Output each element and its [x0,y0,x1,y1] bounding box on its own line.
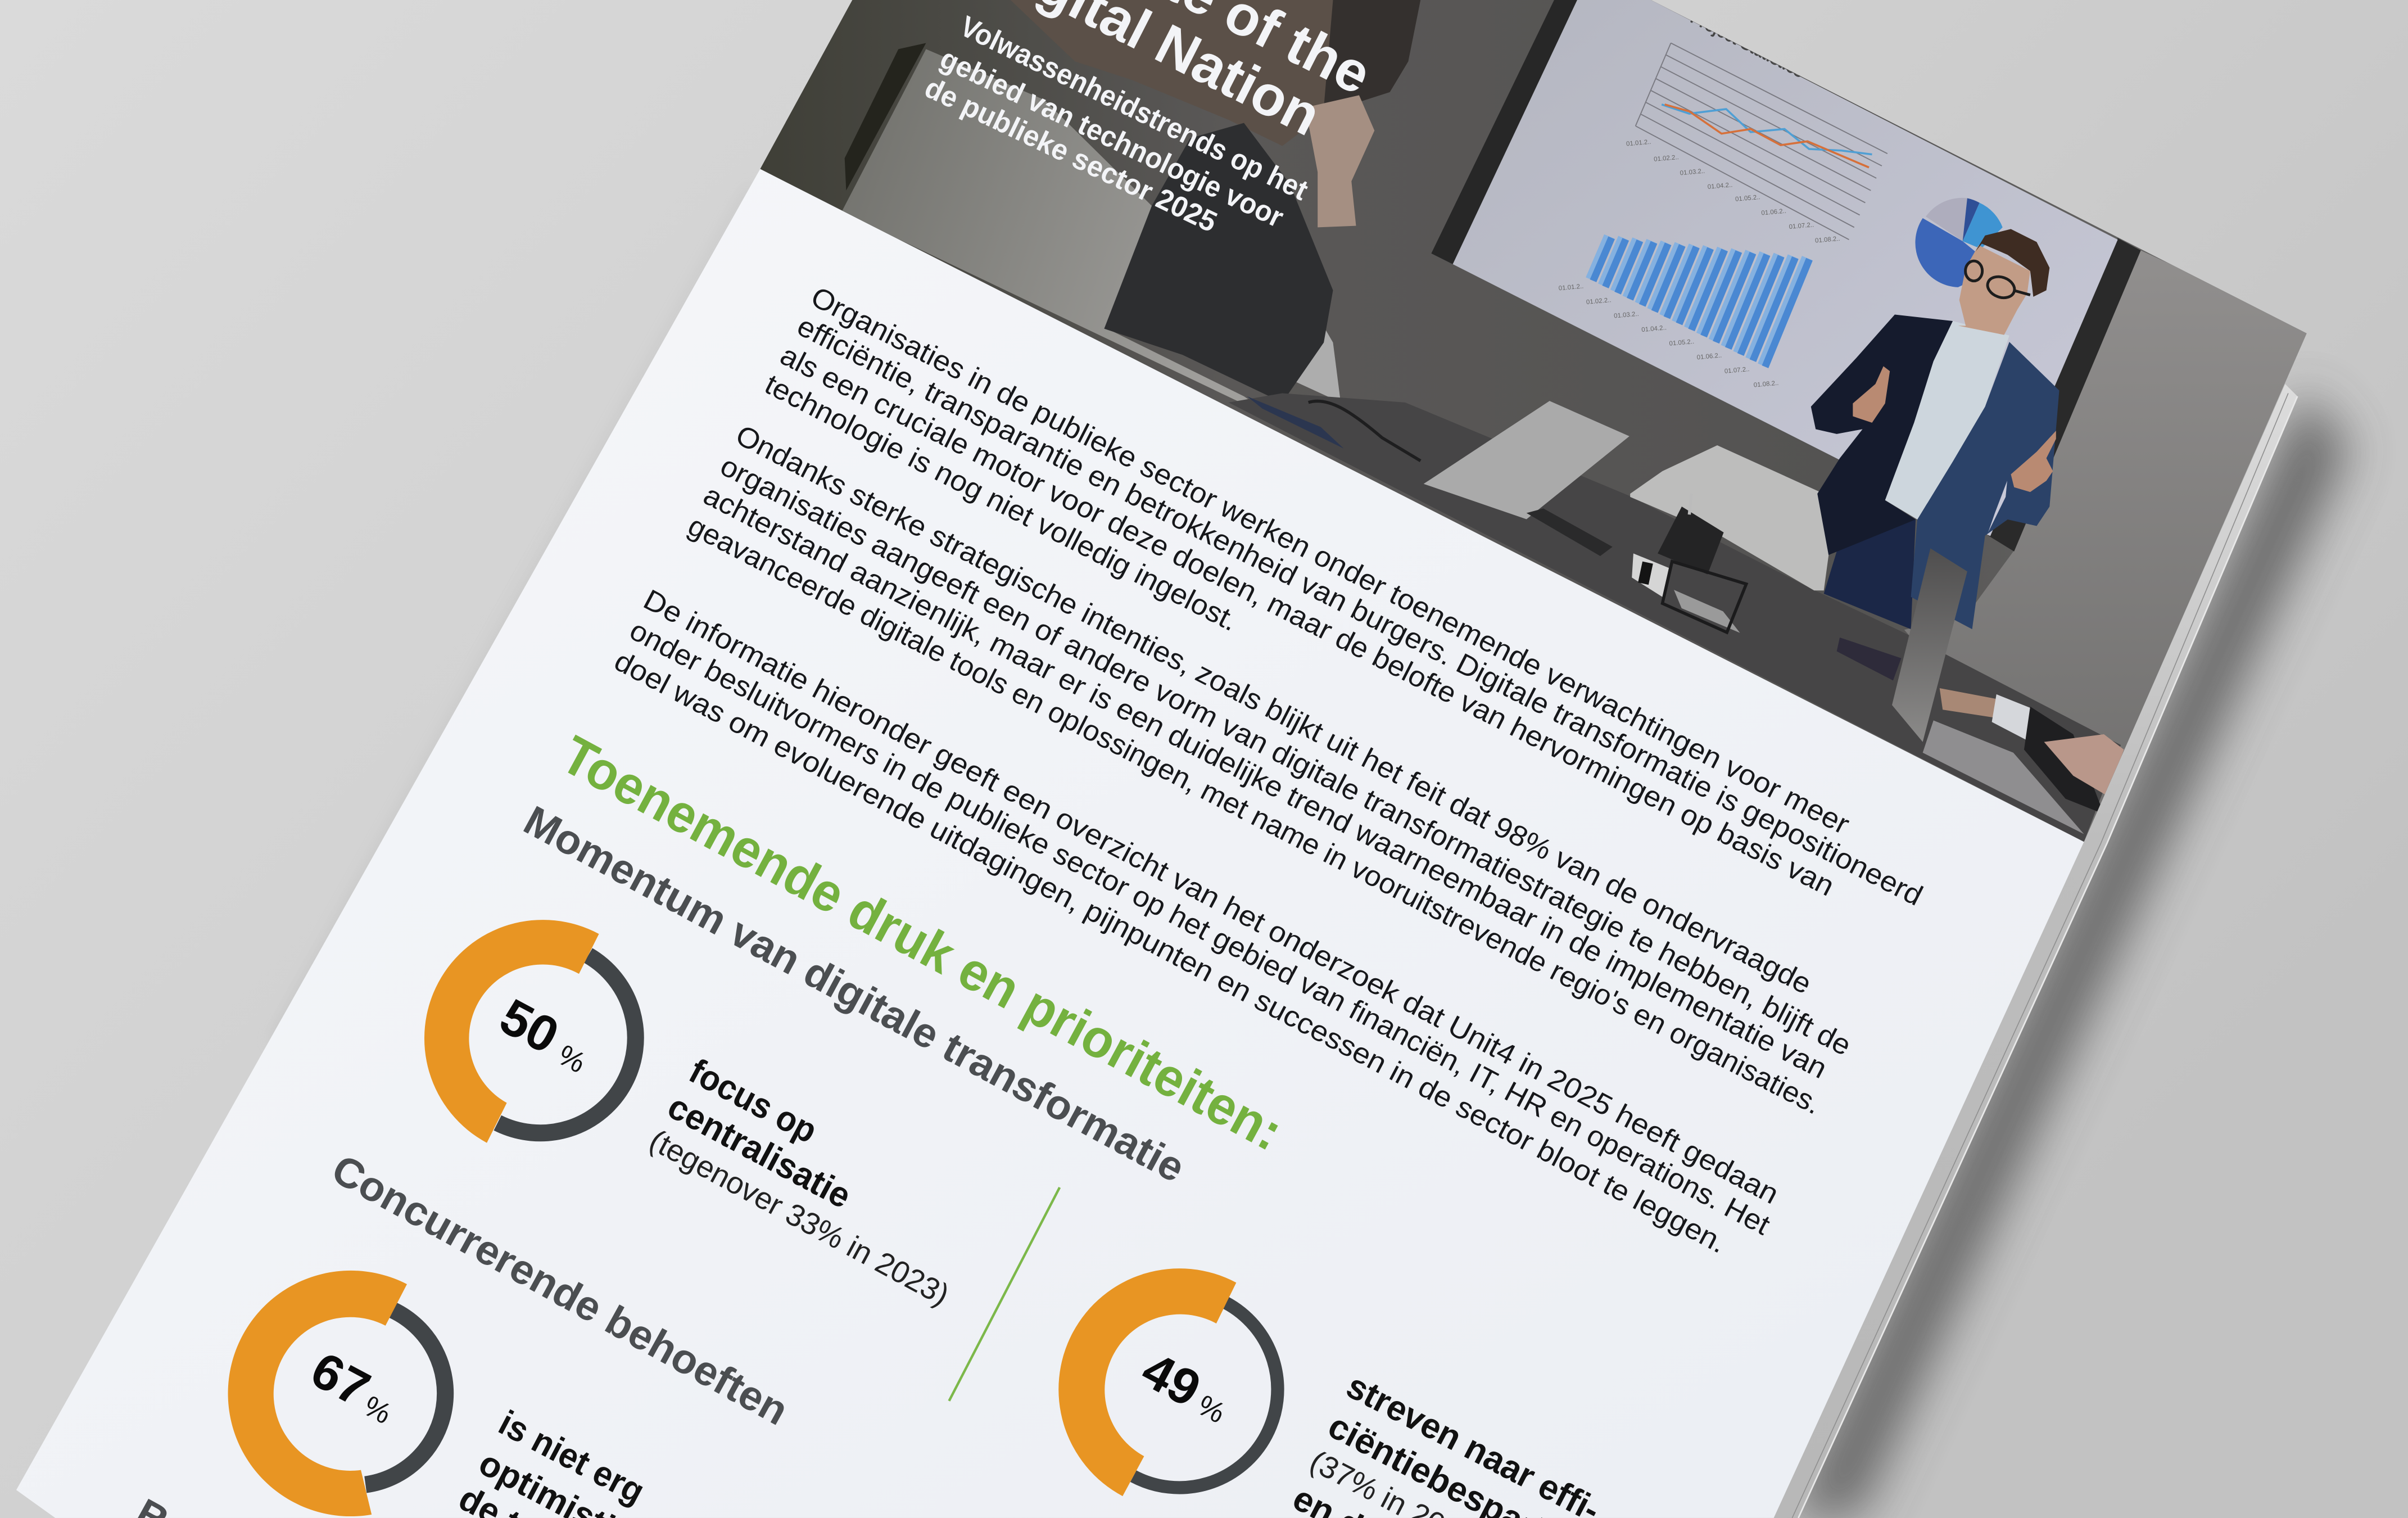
donut: 49%: % [1192,1389,1230,1430]
brochure shadow [1789,392,2350,1517]
line chart: 01.02.2.. [1654,154,1679,163]
table [1229,393,2121,842]
subheading: concurrerende behoeften: Concurrerende behoeften [324,1145,796,1434]
donut: 50%: % [553,1038,591,1079]
glasses [1966,261,2030,301]
donut: 49%: 49 [1133,1341,1210,1418]
presenter [1811,229,2060,629]
blue cushion [1247,396,1344,449]
navy jacket side [1911,342,2060,629]
intro paragraph 3: doel was om evoluerende uitdagingen, pijnpunten en successen in de sector bloot te leggen. [609,644,1732,1259]
man's face and hand [1305,95,1374,227]
trousers [1824,513,1916,629]
right wall [1904,250,2319,845]
white chair back [1267,255,1341,403]
bar chart [1558,237,1809,388]
line chart: 01.01.2.. [1626,139,1651,148]
intro paragraph 2: Ondanks sterke strategische intenties, zoals blijkt uit het feit dat 98% van de ondervraagde [731,419,1817,1000]
line chart: 01.08.2.. [1815,236,1840,245]
intro paragraph 3: onder besluitvormers in de publieke sector op het gebied van financiën, IT, HR en operations. Het [624,614,1775,1241]
line chart: 01.07.2.. [1789,222,1814,231]
brochure white page [16,169,2084,1518]
hair [1975,229,2049,297]
hands on right [1940,688,2124,814]
left sheet edge shadow [269,181,755,1045]
donut: 49% [1058,1268,1278,1496]
intro paragraph 1: efficiëntie, transparantie en betrokkenheid van burgers. Digitale transformatie is gepositioneerd [792,310,1928,912]
intro paragraph 2: achterstand aanzienlijk, maar er is een duidelijke trend waarneembaar in de implementatie van [699,478,1832,1085]
stat text: centralisatie: focus op [683,1051,823,1151]
screen frame left [1431,0,1582,264]
screen frame right [1988,238,2141,552]
panel: header photo [760,0,2319,845]
section heading: Toenemende druk en prioriteiten: [552,724,1292,1162]
left hand [1853,366,1890,423]
right laptop [1892,548,2084,834]
line chart: 01.04.2.. [1707,182,1733,191]
intro paragraph 1: als een cruciale motor voor deze doelen, maar de belofte van hervormingen op basis van [775,338,1839,902]
bar chart: 01.04.2.. [1641,324,1667,333]
donut: 50% [424,920,636,1143]
man's hair [1324,0,1420,107]
bar chart: 01.08.2.. [1753,380,1779,388]
line chart: 01.05.2.. [1735,194,1760,203]
intro paragraph 1: Organisaties in de publieke sector werken onder toenemende verwachtingen voor meer [806,281,1855,841]
pie chart [1915,198,2003,287]
line chart: 01.06.2.. [1761,208,1787,216]
intro paragraph 2: geavanceerde digitale tools en oplossingen, met name in vooruitstrevende regio's en organisaties. [683,509,1826,1121]
woman's blouse [842,49,1248,401]
bar chart: 01.06.2.. [1696,352,1722,361]
intro paragraph 2: organisaties aangeeft een of andere vorm van digitale transformatiestrategie te hebben, blijft de [716,449,1857,1061]
dark wall recess [845,43,926,191]
purple notebook [1837,638,1901,680]
presentation screen [1453,0,2118,536]
subtitle: Volwassenheidstrends op het [955,10,1313,207]
intro paragraph 1: technologie is nog niet volledig ingelost. [760,368,1243,637]
cable on table [1309,401,1420,461]
dark jacket side [1811,315,1953,555]
left laptop [1424,401,1630,519]
face and neck [1958,245,2030,335]
woman's hair [1011,0,1336,146]
shirt [1885,321,2009,519]
chair [1630,445,1834,590]
intro paragraph 3: De informatie hieronder geeft een overzicht van het onderzoek dat Unit4 in 2025 heeft gedaan [639,583,1784,1210]
bar chart: 01.02.2.. [1586,297,1612,306]
bar chart: 01.03.2.. [1614,311,1639,320]
subtitle: de publieke sector 2025 [920,71,1222,239]
screen gap beside arm [1988,481,2007,532]
donut: 67%: % [358,1390,396,1431]
stat text: optimisme: is niet erg [492,1403,651,1512]
right hand [2011,431,2056,492]
donut: 50%: 50 [491,988,568,1065]
bar chart: 01.01.2.. [1558,283,1584,292]
bar chart: 01.07.2.. [1724,366,1750,375]
man's dark shirt [1104,123,1333,403]
vertical divider [949,1187,1060,1401]
slide title: Project Statistics [1688,9,1807,81]
line chart: 01.03.2.. [1680,168,1705,177]
stat text: centralisatie: centralisatie [662,1087,857,1216]
bar chart: 01.05.2.. [1669,338,1695,347]
donut: 67% [228,1271,445,1516]
subheading: momentum: Momentum van digitale transformatie [517,797,1193,1191]
paper and pen holder [1632,494,1746,633]
photo wall [760,0,2311,845]
phone on table [1527,508,1613,556]
page stack edge [1768,384,2297,1518]
donut: 67%: 67 [302,1341,379,1418]
subtitle: gebied van technologie voor [935,42,1288,234]
line chart [1626,43,1888,245]
stat text: centralisatie: (tegenover 33% in 2023) [644,1123,955,1312]
